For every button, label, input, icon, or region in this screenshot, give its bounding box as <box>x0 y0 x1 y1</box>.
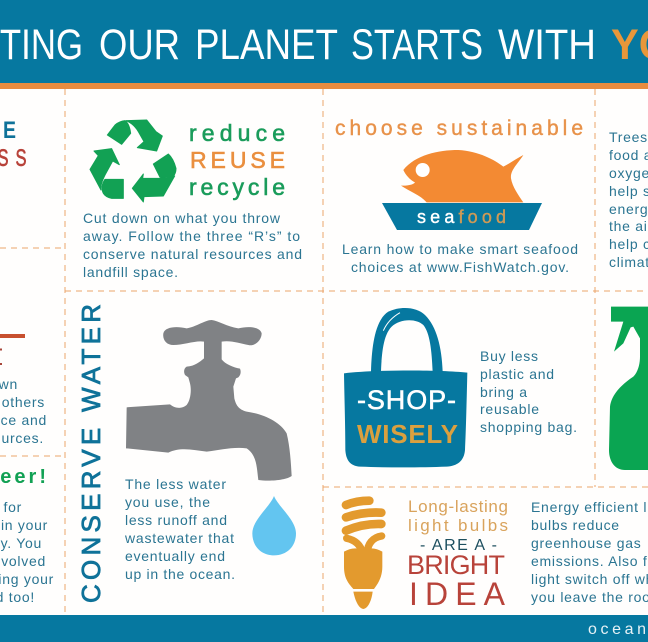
water text: up in the ocean. <box>125 566 235 582</box>
recycling heading: REUSE <box>190 147 285 173</box>
panel: top-left heading fragment: S <box>16 145 26 172</box>
recycling text: away. Follow the three “R’s” to <box>83 228 300 244</box>
header banner <box>0 0 648 89</box>
volunteer text: volved <box>1 553 46 569</box>
seafood text <box>342 241 578 275</box>
bulb heading <box>407 497 508 612</box>
icon: shopping bag <box>344 308 467 467</box>
bulb heading: light bulbs <box>408 516 508 535</box>
seafood text: choices at www.FishWatch.gov. <box>351 259 569 275</box>
recycling text: landfill space. <box>83 264 178 280</box>
red rule <box>0 334 25 338</box>
title: STARTS <box>351 21 483 69</box>
icon: green spray bottle <box>609 307 648 470</box>
bag label <box>357 385 458 449</box>
icon: faucet <box>126 320 292 481</box>
water text: The less water <box>125 476 226 492</box>
water text: wastewater that <box>124 530 234 546</box>
volunteer text <box>0 499 54 605</box>
water text <box>124 476 235 582</box>
icon: water drop <box>252 496 296 555</box>
water text: less runoff and <box>125 512 227 528</box>
panel: conserve water <box>76 304 296 603</box>
panel: reduce reuse recycle <box>83 120 302 280</box>
bag text: bring a <box>480 384 527 400</box>
icon: light bulb <box>344 501 382 609</box>
panel: left middle fragment <box>0 334 47 446</box>
recycling text: conserve natural resources and <box>83 246 302 262</box>
recycling text <box>83 210 302 280</box>
panel: bright idea <box>344 497 648 612</box>
left middle text: others <box>2 394 45 410</box>
bulb heading: BRIGHT <box>407 550 505 580</box>
vertical heading: CONSERVE WATER <box>76 304 106 603</box>
seafood label: seafood <box>417 207 506 227</box>
bag text: shopping bag. <box>480 419 577 435</box>
bulb heading: - ARE A - <box>420 537 497 554</box>
panel: shop wisely <box>344 308 577 467</box>
bag text: reusable <box>480 401 539 417</box>
panel: top-left heading fragment: E <box>3 117 16 144</box>
icon: fish <box>401 150 523 202</box>
left middle text: urces. <box>2 430 44 446</box>
energy text: bulbs reduce <box>531 517 620 533</box>
bag text <box>480 348 577 435</box>
red heading fragment <box>0 350 2 364</box>
seafood heading: choose sustainable <box>335 117 583 140</box>
seafood text: Learn how to make smart seafood <box>342 241 578 257</box>
bag label: -SHOP- <box>357 385 456 415</box>
panel: trees text <box>609 129 648 270</box>
recycling text: Cut down on what you throw <box>83 210 281 226</box>
bag text: Buy less <box>480 348 538 364</box>
volunteer heading: eer! <box>0 466 49 488</box>
water text: you use, the <box>125 494 210 510</box>
left middle text: ce and <box>1 412 47 428</box>
bulb heading: Long-lasting <box>408 497 508 516</box>
recycling heading: reduce <box>189 120 285 146</box>
recycling heading <box>189 120 285 200</box>
energy text: greenhouse gas <box>531 535 642 551</box>
volunteer text: in your <box>1 517 48 533</box>
panel: top-left heading fragment <box>0 117 26 172</box>
title <box>0 21 648 69</box>
title: WITH <box>498 21 596 69</box>
volunteer text: ing your <box>0 571 54 587</box>
panel: sustainable seafood <box>335 117 583 275</box>
bag text: plastic and <box>480 366 554 382</box>
icon: recycling arrows <box>90 120 176 202</box>
volunteer text: for <box>4 499 22 515</box>
title: OUR <box>99 21 180 69</box>
footer <box>0 615 648 642</box>
bag label: WISELY <box>357 419 458 449</box>
volunteer text: y. You <box>1 535 42 551</box>
title: PLANET <box>195 21 338 69</box>
panel: volunteer fragment <box>0 466 54 605</box>
recycling heading: recycle <box>189 174 285 200</box>
bulb heading: IDEA <box>409 576 506 612</box>
left middle text <box>0 376 47 446</box>
water text: eventually end <box>125 548 225 564</box>
icon: boat <box>382 203 542 230</box>
energy text <box>531 499 648 605</box>
